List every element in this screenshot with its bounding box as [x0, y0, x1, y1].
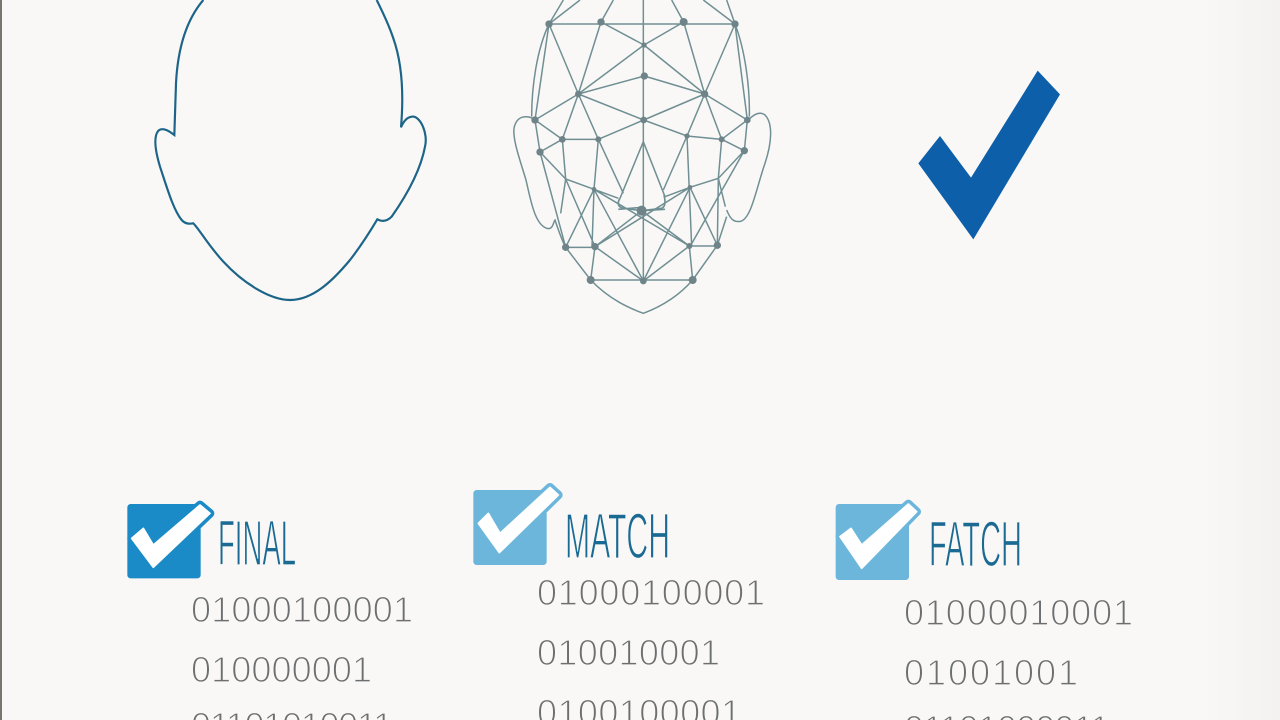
icon: fatch checkbox [836, 504, 917, 580]
panel: match: MATCH [565, 500, 670, 572]
icon: large check mark [918, 71, 1060, 239]
panel: final: FINAL [218, 507, 296, 579]
panel: fatch: FATCH [929, 508, 1022, 580]
binary text: match: 010010001 [537, 632, 720, 673]
binary text: final: 010000001 [191, 649, 372, 690]
panel: fatch [836, 504, 1133, 720]
binary text: final [191, 589, 413, 720]
binary text: match: 01000100001 [537, 572, 765, 613]
icon: final checkbox [127, 504, 210, 578]
icon: head outline [155, 0, 426, 300]
binary text: final: 01000100001 [191, 589, 413, 630]
icon: face mesh [514, 0, 771, 313]
binary text: fatch: 01000010001 [904, 592, 1133, 633]
panel: final [127, 504, 413, 720]
binary text: fatch: 01001001 [904, 652, 1078, 693]
icon: match checkbox [473, 487, 558, 565]
binary text: fatch [904, 592, 1133, 720]
binary text: match [537, 572, 765, 720]
panel: match [473, 487, 765, 720]
